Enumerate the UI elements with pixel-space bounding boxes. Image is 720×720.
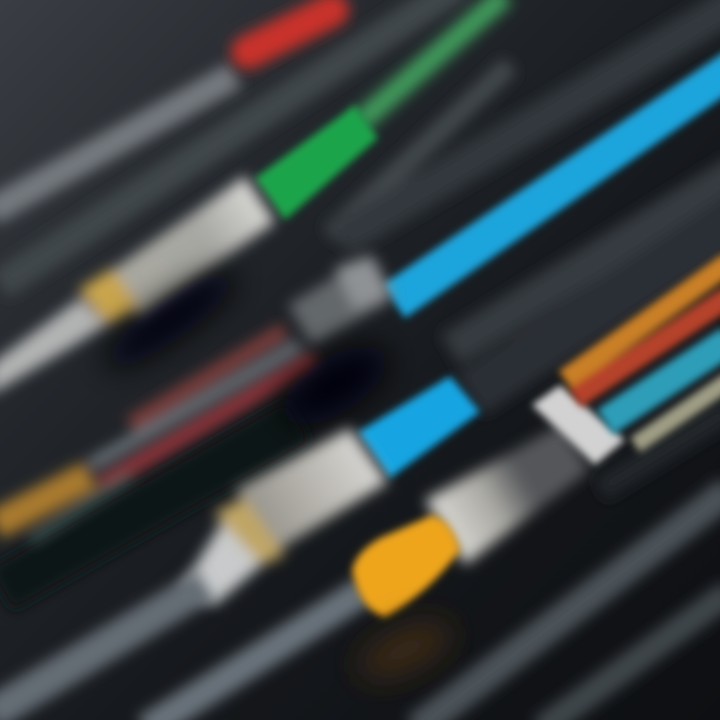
connector: shadow under green connector <box>93 258 247 382</box>
connector: gray collar at blue cable <box>288 255 392 345</box>
cable: gray below orange connector <box>145 590 365 720</box>
connector: blue sleeve and cable <box>382 48 720 318</box>
cable: gray lower left <box>0 585 205 715</box>
shadow: below blue connector <box>269 329 401 441</box>
connector: orange reflection <box>351 611 459 689</box>
connector: white body lower <box>180 428 388 605</box>
connector: white body with yellow band <box>0 176 275 395</box>
cables: lower right gray <box>415 490 720 720</box>
cable: gray top left <box>0 75 235 212</box>
connector: green sleeve <box>255 105 378 220</box>
connector: orange sleeve <box>352 515 460 617</box>
cable: thin green <box>360 0 505 122</box>
connector: white band multicolor <box>532 385 625 465</box>
cable: multicolor fibers left <box>0 330 315 540</box>
cable: multicolor fibers right <box>565 262 720 445</box>
connector: white collar <box>425 425 590 565</box>
connector: red tip <box>248 10 332 52</box>
connector: cyan sleeve <box>358 376 480 478</box>
